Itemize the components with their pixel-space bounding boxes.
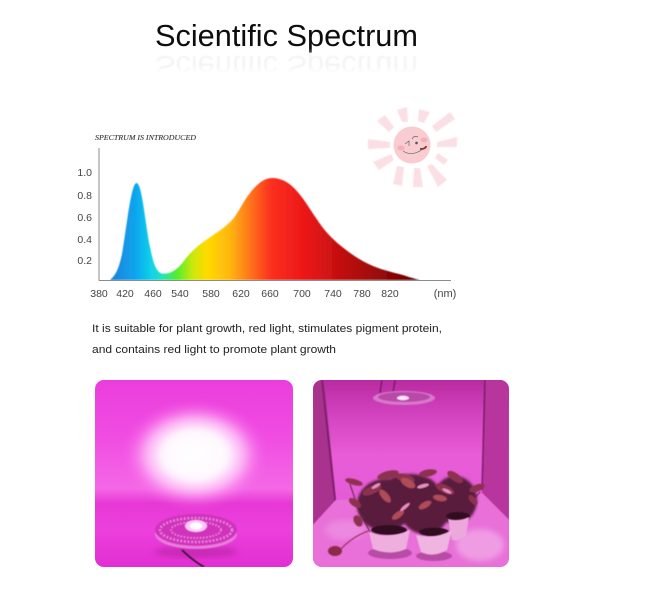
x axis labels: 420 [116, 288, 134, 300]
chart subtitle: SPECTRUM IS INTRODUCED [95, 133, 197, 142]
title: Scientific Spectrum [155, 18, 418, 53]
x axis labels [90, 288, 456, 300]
x axis labels: 380 [90, 288, 108, 300]
stems [350, 480, 480, 532]
title reflection: Scientific Spectrum [155, 49, 418, 84]
soil shadows [371, 512, 470, 536]
y axis [98, 148, 100, 280]
description text: and contains red light to promote plant growth [92, 344, 336, 356]
facial features [403, 136, 426, 154]
foliage shadow mass [357, 474, 477, 534]
wall glow [128, 404, 262, 506]
tent right wall [482, 380, 509, 520]
y axis labels: 0.8 [77, 190, 92, 202]
photo: plants under grow light [313, 380, 509, 567]
x axis labels: 580 [202, 288, 220, 300]
sun rays [368, 107, 457, 187]
cheeks [398, 146, 404, 150]
lamp body [155, 514, 237, 549]
x axis [99, 280, 451, 282]
flower pots [368, 517, 469, 561]
x axis labels: 460 [144, 288, 162, 300]
tent frame poles [322, 380, 485, 500]
description text: It is suitable for plant growth, red light, stimulates pigment protein, [92, 323, 442, 335]
y axis labels: 0.2 [77, 255, 92, 267]
cable [182, 550, 204, 567]
description text [92, 323, 442, 356]
hanging lamp [373, 380, 435, 405]
leaves, highlights [371, 482, 452, 512]
plant foliage [328, 468, 486, 556]
x axis labels: (nm) [434, 288, 456, 300]
x axis labels: 780 [353, 288, 371, 300]
title [155, 18, 418, 84]
leaves, mid tone [345, 468, 486, 528]
sun face [394, 126, 430, 164]
y axis labels: 1.0 [77, 167, 92, 179]
tent floor [313, 493, 509, 567]
x axis labels: 700 [293, 288, 311, 300]
panel: spectrum chart [77, 133, 456, 300]
tent left wall [313, 380, 336, 525]
y axis labels: 0.4 [77, 234, 92, 246]
icon: smiling sun [368, 107, 457, 187]
y axis labels [77, 167, 92, 267]
drooping leaf [328, 546, 342, 556]
x axis labels: 740 [324, 288, 342, 300]
x axis labels: 620 [232, 288, 250, 300]
spectrum curve [110, 178, 420, 280]
photo: glowing LED lamp [95, 380, 293, 567]
x axis labels: 540 [171, 288, 189, 300]
x axis labels: 820 [381, 288, 399, 300]
leaves, warm tone [377, 476, 447, 521]
lamp shadow [154, 546, 238, 558]
floor light patches [456, 529, 504, 561]
y axis labels: 0.6 [77, 212, 92, 224]
x axis labels: 660 [261, 288, 279, 300]
